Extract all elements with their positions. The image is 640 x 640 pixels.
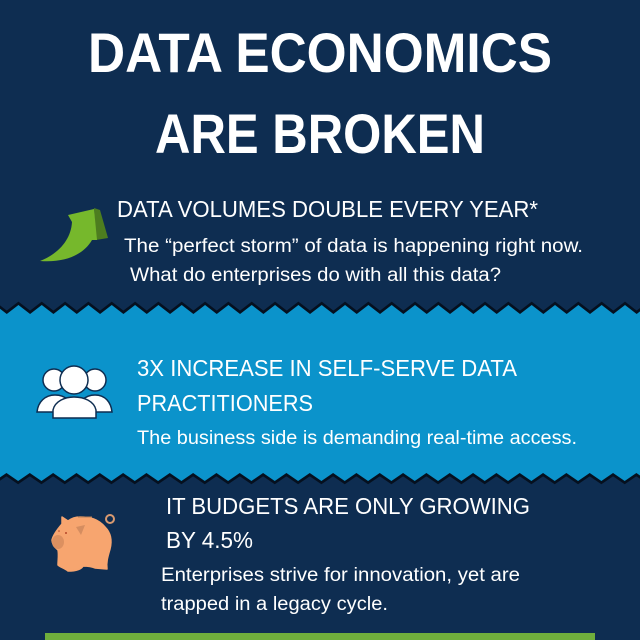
heading: IT budgets: BY 4.5% — [166, 527, 253, 553]
title — [88, 21, 552, 165]
icon: piggy bank — [52, 515, 114, 571]
section: data volumes — [117, 196, 583, 286]
heading: self-serve practitioners: PRACTITIONERS — [137, 390, 313, 416]
title: ARE BROKEN — [155, 102, 485, 165]
body text: data volumes — [124, 236, 583, 286]
body text: self-serve practitioners: The business side is demanding real-time access. — [137, 428, 577, 449]
body text: data volumes: What do enterprises do with all this data? — [130, 265, 501, 286]
panel: self-serve band — [0, 305, 640, 481]
heading: self-serve practitioners: 3X INCREASE IN SELF-SERVE DATA — [137, 355, 518, 381]
section: self-serve practitioners — [137, 355, 577, 449]
heading: self-serve practitioners — [137, 355, 518, 416]
icon: group of people — [37, 366, 112, 418]
body text: IT budgets: trapped in a legacy cycle. — [161, 594, 388, 615]
heading: data volumes: DATA VOLUMES DOUBLE EVERY YEAR* — [117, 196, 538, 222]
green footer bar — [45, 633, 595, 640]
heading: IT budgets: IT BUDGETS ARE ONLY GROWING — [166, 493, 530, 519]
icon: green up arrow — [40, 208, 108, 261]
section: IT budgets — [161, 493, 530, 615]
heading: IT budgets — [166, 493, 530, 553]
body text: IT budgets — [161, 565, 520, 615]
body text: data volumes: The “perfect storm” of data is happening right now. — [124, 236, 583, 257]
title: DATA ECONOMICS — [88, 21, 552, 84]
body text: IT budgets: Enterprises strive for innovation, yet are — [161, 565, 520, 586]
